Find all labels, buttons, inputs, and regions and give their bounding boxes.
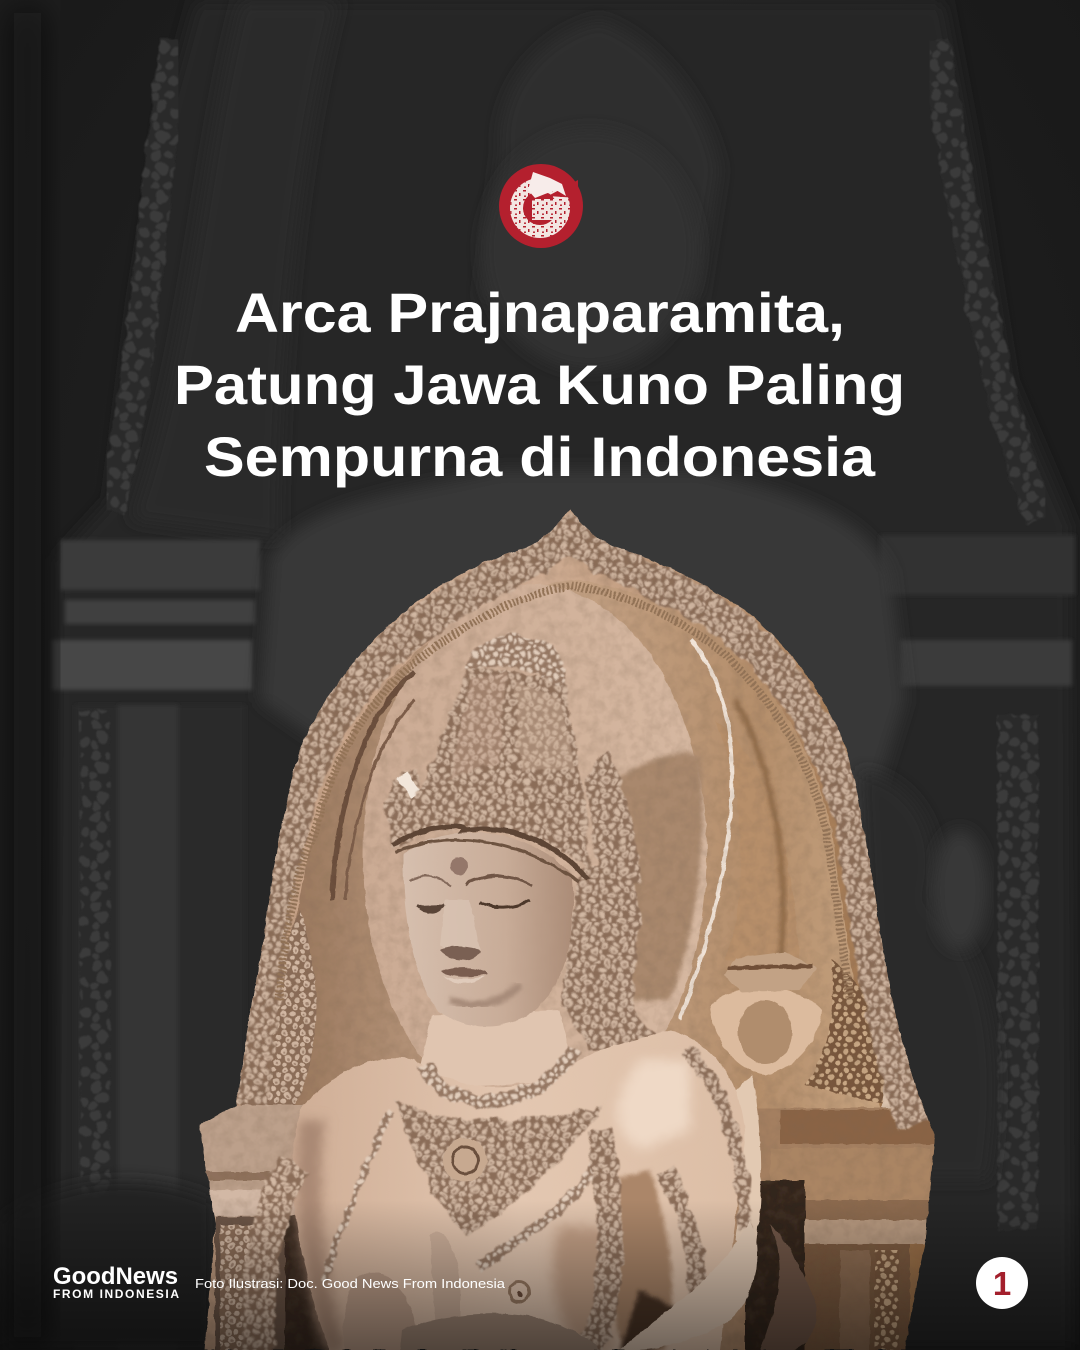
logo badge [499, 164, 583, 248]
footer brand: GoodNews [53, 1263, 178, 1290]
arm shadows [605, 1170, 672, 1350]
halo [363, 585, 707, 1125]
necklace [425, 1050, 575, 1101]
title: Patung Jawa Kuno Paling [174, 353, 905, 416]
right hair [384, 752, 700, 1075]
flame ornaments [240, 910, 316, 1105]
facial features [410, 857, 532, 1005]
footer brand: FROM INDONESIA [53, 1287, 179, 1301]
outer arch band [275, 580, 880, 1110]
sash [590, 1130, 610, 1350]
texture [190, 500, 950, 1350]
base [200, 1105, 305, 1217]
hand [343, 1232, 600, 1350]
left arm drape [258, 1165, 295, 1350]
lotus [710, 952, 822, 1250]
crown [395, 634, 590, 870]
page number badge [976, 1257, 1028, 1309]
title: Sempurna di Indonesia [204, 425, 876, 488]
photo credit: Foto Ilustrasi: Doc. Good News From Indonesia [195, 1277, 505, 1291]
chest jewellery [395, 1100, 605, 1235]
face [403, 832, 573, 1026]
halo shadow [620, 750, 706, 1003]
statue [190, 500, 950, 1350]
torso [293, 1030, 745, 1350]
bottom fade [0, 1200, 1080, 1350]
forehead band [393, 826, 588, 880]
arch ornament [250, 535, 915, 1125]
title [174, 281, 905, 488]
title: Arca Prajnaparamita, [235, 281, 845, 344]
lower right stalk flower [760, 1225, 816, 1350]
breast [509, 1282, 529, 1302]
neck [415, 1010, 575, 1090]
stela [190, 500, 950, 1350]
torso shading [296, 1120, 345, 1350]
page number badge: 1 [993, 1265, 1011, 1302]
